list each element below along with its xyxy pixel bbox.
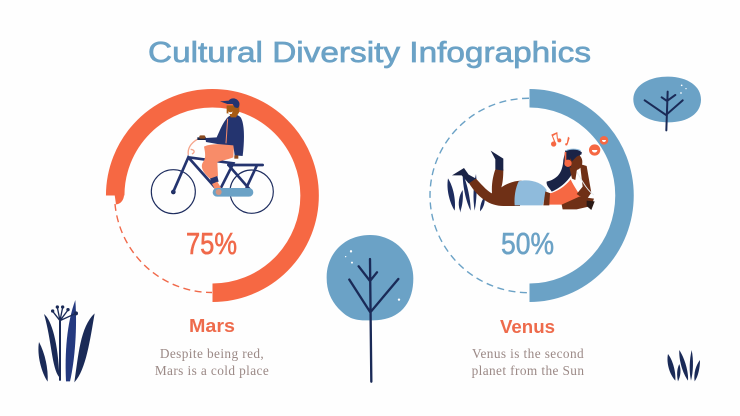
icon: large tree xyxy=(327,235,413,382)
title: Cultural Diversity Infographics xyxy=(148,37,591,69)
stat: 50%: 50% xyxy=(501,226,554,261)
shorts xyxy=(514,180,547,205)
panel: venus xyxy=(430,98,624,378)
face xyxy=(570,154,582,170)
icon: small tree xyxy=(633,77,701,130)
heading: mars: Mars xyxy=(189,316,235,336)
emoji xyxy=(589,144,600,156)
description: mars: Mars is a cold place xyxy=(155,363,269,378)
icon: cyclist xyxy=(115,98,273,214)
description: venus: planet from the Sun xyxy=(472,363,584,378)
ring dashed remainder: venus xyxy=(430,98,529,293)
ring progress: venus 50% xyxy=(530,98,624,293)
shoes xyxy=(452,168,476,183)
description: venus: Venus is the second xyxy=(472,346,584,361)
torso xyxy=(543,191,551,205)
icon: right grass xyxy=(667,350,700,381)
stat: 75%: 75% xyxy=(186,226,237,261)
pants xyxy=(202,144,234,179)
description: mars: Despite being red, xyxy=(160,346,264,361)
hair xyxy=(547,149,582,192)
plants xyxy=(447,173,485,213)
arm and jacket xyxy=(205,115,244,156)
head xyxy=(227,105,239,117)
music notes xyxy=(551,132,570,147)
headphones xyxy=(565,152,566,162)
panel: mars xyxy=(115,98,310,378)
ring progress: mars 75% xyxy=(115,98,310,293)
legs xyxy=(469,169,522,206)
chain guard xyxy=(213,188,253,197)
heading: venus: Venus xyxy=(500,317,555,337)
arm xyxy=(577,164,591,201)
icon: left plant xyxy=(38,300,95,382)
icon: woman listening to music xyxy=(447,132,608,213)
ring dashed remainder: mars xyxy=(115,204,212,292)
